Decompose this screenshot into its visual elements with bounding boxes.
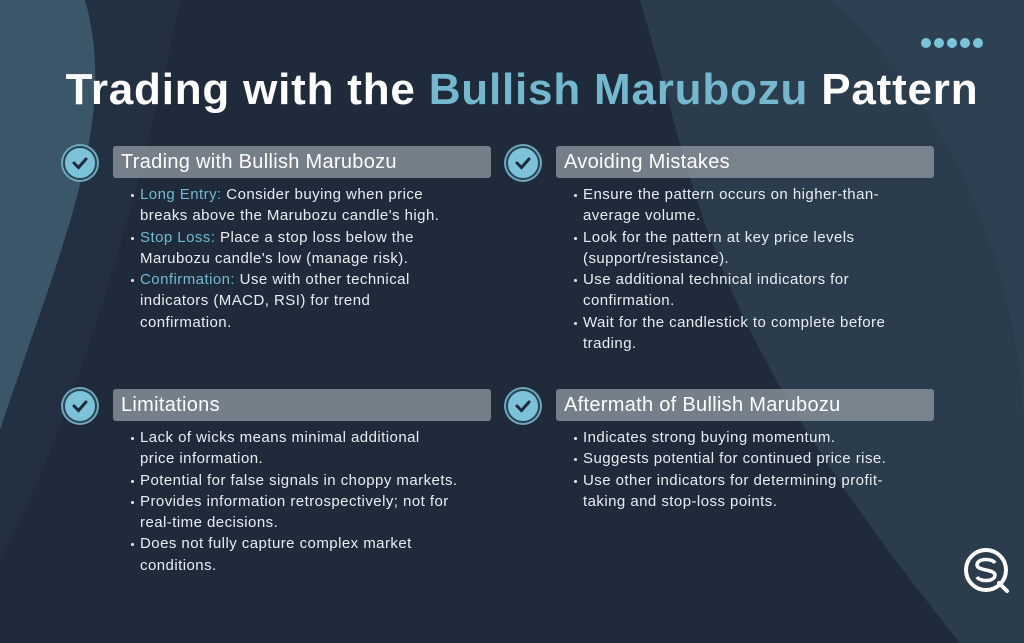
icon: check bbox=[506, 146, 540, 180]
bullet list: Does not fully capture complex market bbox=[140, 535, 412, 552]
bullet list: Indicates strong buying momentum. bbox=[583, 429, 835, 446]
bullet list: Long Entry: Consider buying when price bbox=[140, 186, 423, 203]
bullet list bbox=[574, 429, 886, 510]
bullet list bbox=[131, 186, 439, 331]
bullet list: confirmation. bbox=[583, 292, 675, 309]
panel: aftermath bbox=[504, 387, 934, 510]
bullet list: Use other indicators for determining profit- bbox=[583, 472, 883, 489]
bullet list: Suggests potential for continued price rise. bbox=[583, 450, 886, 467]
bullet list: real-time decisions. bbox=[140, 514, 278, 531]
bullet list: Use additional technical indicators for bbox=[583, 271, 849, 288]
bullet list: Confirmation: Use with other technical bbox=[140, 271, 410, 288]
bullet list bbox=[574, 186, 885, 352]
heading: Limitations bbox=[121, 394, 220, 416]
icon: check bbox=[63, 146, 97, 180]
heading: Avoiding Mistakes bbox=[564, 151, 730, 173]
bullet list: price information. bbox=[140, 450, 263, 467]
bullet list: Potential for false signals in choppy markets. bbox=[140, 472, 458, 489]
bullet list: average volume. bbox=[583, 207, 701, 224]
heading bbox=[113, 389, 491, 421]
bullet list: Marubozu candle's low (manage risk). bbox=[140, 250, 408, 267]
icon: check bbox=[506, 389, 540, 423]
heading bbox=[556, 146, 934, 178]
icon: logo bbox=[964, 548, 1010, 594]
decorative dots bbox=[921, 38, 983, 48]
bullet list: (support/resistance). bbox=[583, 250, 729, 267]
panel: limitations bbox=[61, 387, 491, 574]
heading: Trading with Bullish Marubozu bbox=[121, 151, 397, 173]
bullet list: Wait for the candlestick to complete before bbox=[583, 314, 885, 331]
panel: trading with bullish marubozu bbox=[61, 144, 491, 331]
bullet list: Lack of wicks means minimal additional bbox=[140, 429, 420, 446]
heading: Aftermath of Bullish Marubozu bbox=[564, 394, 841, 416]
panel: avoiding mistakes bbox=[504, 144, 934, 352]
bullet list: Provides information retrospectively; not for bbox=[140, 493, 449, 510]
bullet list: Ensure the pattern occurs on higher-than- bbox=[583, 186, 879, 203]
title: Trading with the Bullish Marubozu Pattern bbox=[66, 65, 978, 114]
bullet list bbox=[131, 429, 458, 574]
bullet list: Look for the pattern at key price levels bbox=[583, 229, 854, 246]
icon: check bbox=[63, 389, 97, 423]
bullet list: taking and stop-loss points. bbox=[583, 493, 777, 510]
bullet list: breaks above the Marubozu candle's high. bbox=[140, 207, 439, 224]
bullet list: Stop Loss: Place a stop loss below the bbox=[140, 229, 414, 246]
heading bbox=[113, 146, 491, 178]
bullet list: confirmation. bbox=[140, 314, 232, 331]
heading bbox=[556, 389, 934, 421]
bullet list: trading. bbox=[583, 335, 637, 352]
bullet list: conditions. bbox=[140, 557, 217, 574]
bullet list: indicators (MACD, RSI) for trend bbox=[140, 292, 370, 309]
